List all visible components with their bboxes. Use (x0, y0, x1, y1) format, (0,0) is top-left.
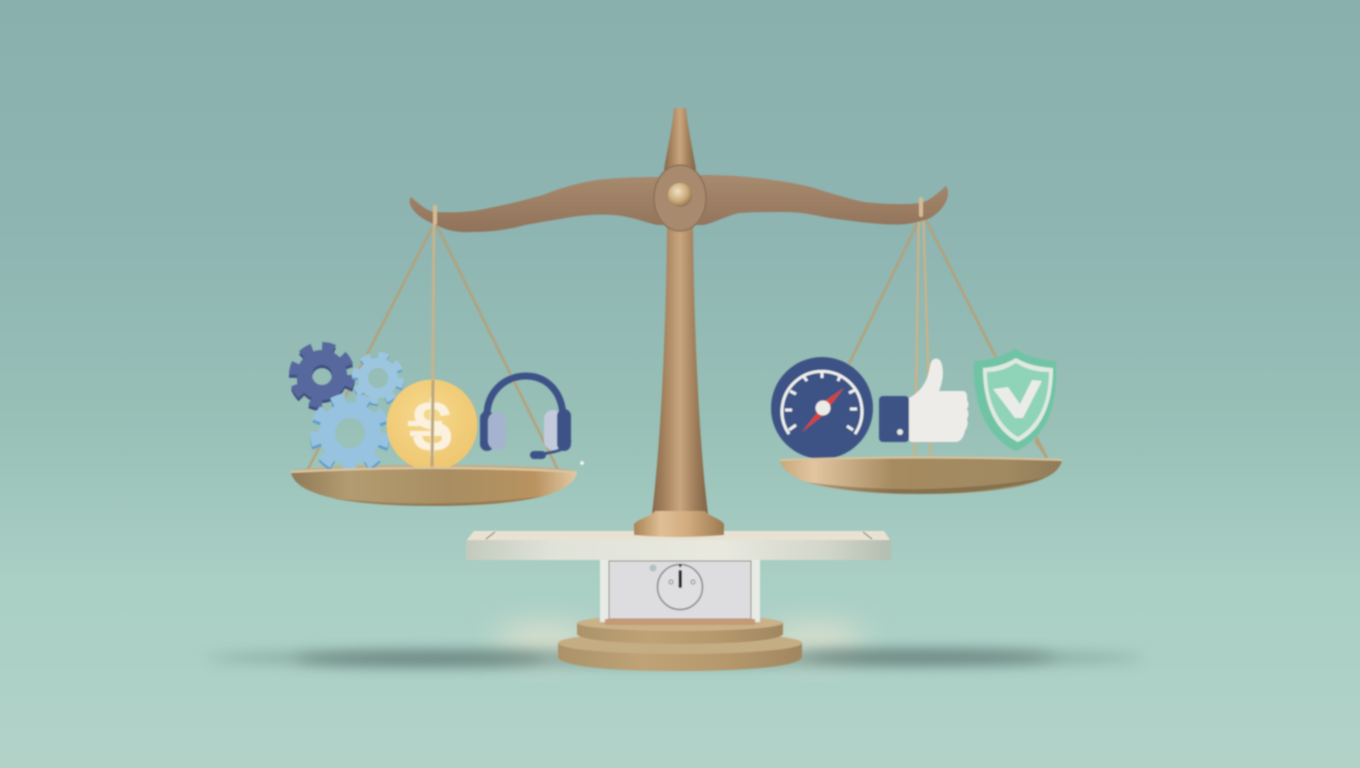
dark gear (294, 347, 350, 406)
dollar coin (386, 380, 478, 471)
foot redraw over shelf (634, 524, 724, 537)
hub knob (668, 183, 692, 207)
lower gold base tier (558, 632, 802, 671)
central post (652, 228, 708, 514)
large light gear (315, 398, 385, 471)
scale box frame (600, 558, 760, 622)
upper gold base tier (577, 615, 783, 644)
shield check (974, 348, 1056, 451)
headset (480, 376, 571, 459)
pan sparkle (580, 461, 584, 465)
thumbs up (879, 359, 968, 442)
right hook (919, 197, 923, 217)
small light gear (356, 356, 400, 402)
scale dial (650, 564, 702, 610)
left pan back rim (291, 465, 577, 479)
left hook (433, 205, 437, 225)
base light glow (495, 626, 865, 654)
right pan strings (848, 206, 1047, 458)
beam (410, 175, 948, 232)
balance scale (291, 108, 1062, 671)
top spire (664, 108, 696, 170)
copper strip (605, 619, 755, 625)
white shelf (466, 531, 891, 560)
dollar coin: $ (412, 387, 452, 467)
left pan (291, 468, 577, 506)
speedometer (771, 357, 873, 459)
left pan strings (307, 210, 558, 472)
floor shadow (205, 650, 1145, 666)
shield string segment (1035, 440, 1047, 458)
right pan (780, 458, 1062, 494)
scale box face (609, 561, 751, 619)
beam hub (654, 165, 706, 231)
post foot (634, 511, 724, 537)
